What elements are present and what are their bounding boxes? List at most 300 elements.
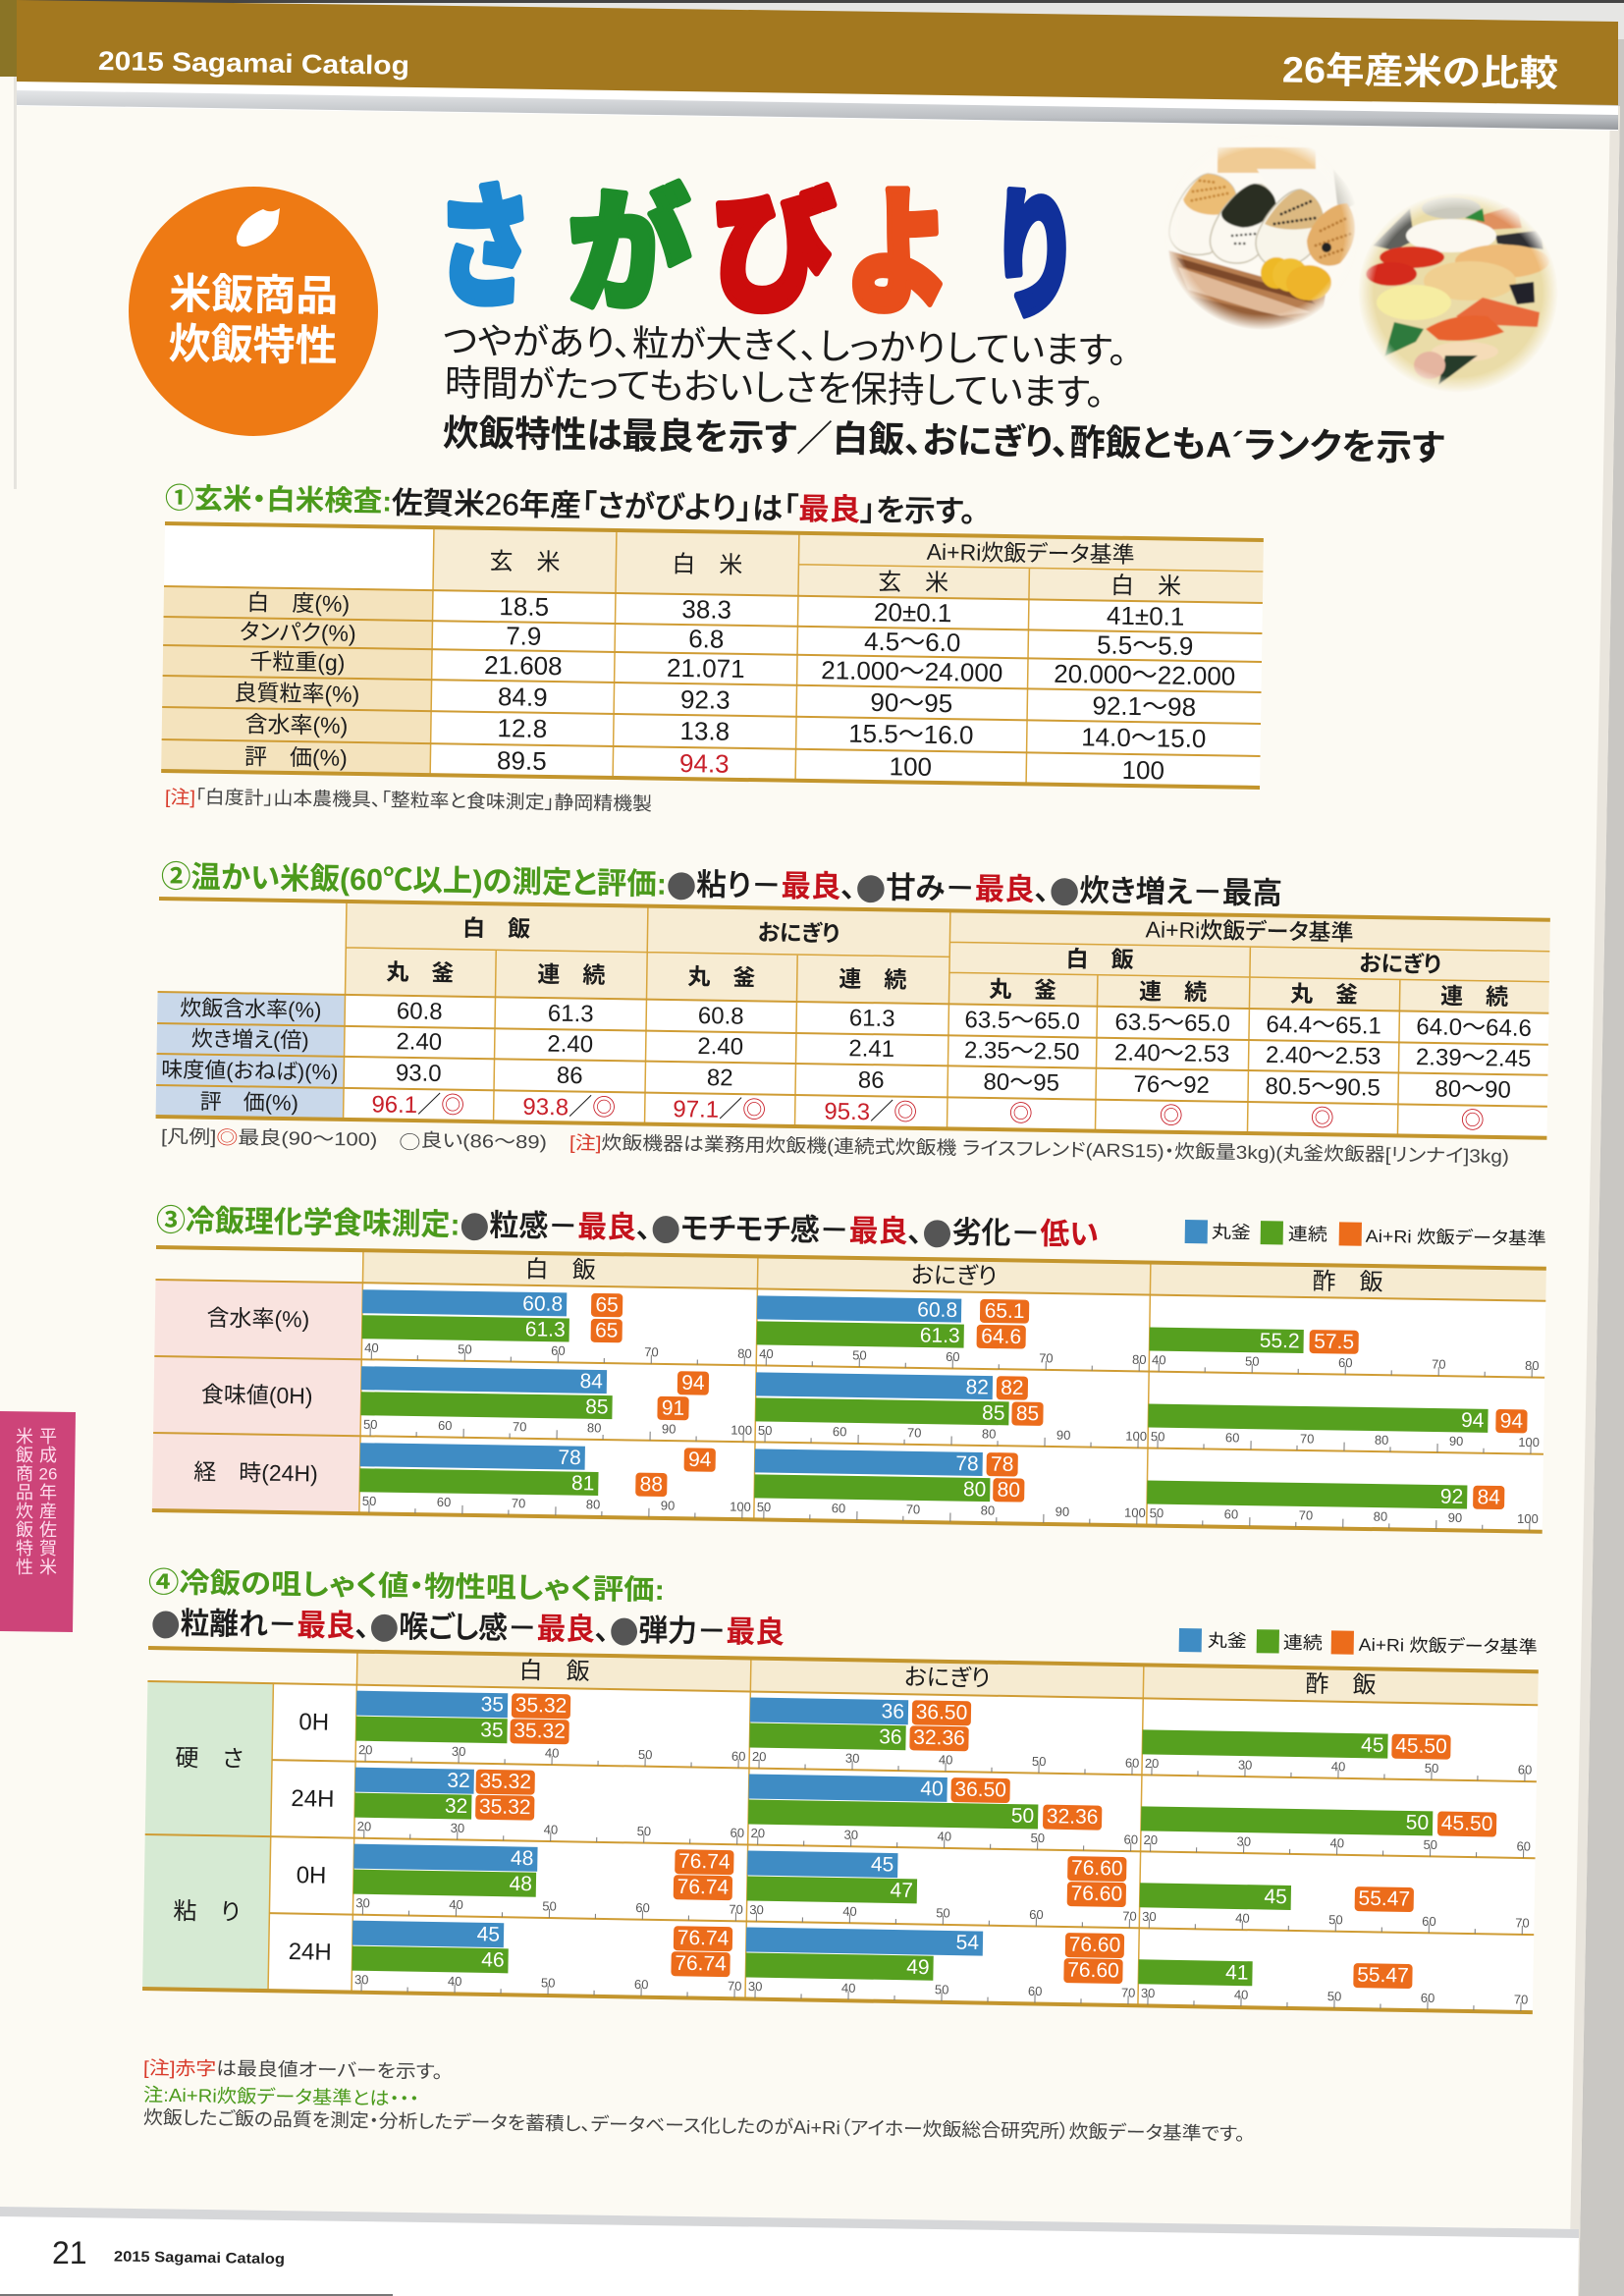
bars: 白飯 粘り 24H: 60	[634, 1977, 649, 1992]
table 1: 玄米・白米検査: 含水率(%)	[244, 711, 348, 738]
bars: 酢飯 硬さ 24H: 45.50	[1441, 1812, 1493, 1835]
bars: 白飯 粘り 0H: 48	[511, 1847, 534, 1870]
chart 3: 冷飯理化学食味測定: 酢 飯	[1312, 1269, 1383, 1296]
table 2: 温かい米飯の測定と評価: 炊き増え(倍)	[191, 1026, 309, 1053]
bars: 白飯 粘り 0H	[352, 1844, 744, 1921]
bars: 白飯 硬さ 24H: 30	[451, 1821, 464, 1835]
table 2: 温かい米飯の測定と評価: 丸 釜	[687, 963, 756, 990]
page number and catalog name	[52, 2235, 285, 2270]
bars: 酢飯 含水率	[1149, 1328, 1540, 1378]
bars: 白飯 含水率: 40	[364, 1340, 379, 1355]
table 1: 玄米・白米検査: 94.3	[679, 748, 730, 779]
table 2: 温かい米飯の測定と評価: 93.0	[396, 1060, 442, 1087]
bars: 酢飯 経時: 84	[1477, 1486, 1500, 1509]
bars: 酢飯 硬さ 0H: 30	[1238, 1758, 1252, 1773]
bars: おにぎり 硬さ 24H: 60	[1123, 1832, 1138, 1847]
table 2: 温かい米飯の測定と評価: 80～95	[983, 1068, 1059, 1097]
bars: 白飯 経時: 78	[558, 1447, 581, 1469]
bars: 白飯 経時: 88	[639, 1473, 663, 1496]
bars: 酢飯 硬さ 24H: 30	[1236, 1833, 1251, 1849]
bars: 白飯 食味値: 60	[438, 1418, 453, 1433]
bars: おにぎり 食味値: 85	[1016, 1402, 1039, 1425]
chart 3: 冷飯理化学食味測定	[152, 1247, 1546, 1532]
bars: 酢飯 粘り 0H: 30	[1142, 1909, 1157, 1924]
heading 4: ●粒離れ－最良、●喉ごし感－最良、●弾力－最良	[151, 1601, 785, 1654]
table 2: 温かい米飯の測定と評価: 白 飯	[1065, 946, 1134, 972]
table 1: 玄米・白米検査: 90～95	[870, 687, 952, 718]
bars: 白飯 経時: 81	[571, 1472, 595, 1495]
chart 4: 冷飯の咀しゃく値: 硬 さ	[175, 1745, 244, 1773]
footer notes: 炊飯したご飯の品質を測定・分析したデータを蓄積し、データベース化したのがAi+Ri（アイホー炊飯総合研究所）炊飯データ基準です。	[143, 2107, 1245, 2146]
table 2: 温かい米飯の測定と評価: 63.5～65.0	[1114, 1009, 1230, 1037]
tab text: 佐	[39, 1520, 57, 1540]
tagline text: 炊飯特性は最良を示す／白飯、おにぎり、酢飯ともA´ランクを示す	[443, 413, 1444, 468]
table 2: 温かい米飯の測定と評価: 93.8／◎	[522, 1093, 616, 1121]
bars: 白飯 硬さ 0H: 35	[480, 1719, 504, 1742]
table 2: 温かい米飯の測定と評価: 86	[557, 1063, 583, 1089]
bars: 白飯 硬さ 24H: 50	[637, 1824, 651, 1838]
bars: おにぎり 粘り 0H: 47	[890, 1879, 913, 1902]
chart 4: 冷飯の咀しゃく値: 0H	[298, 1709, 329, 1736]
table 2: 温かい米飯の測定と評価: ◎	[1009, 1101, 1033, 1127]
table 1: 玄米・白米検査: 89.5	[497, 745, 547, 776]
bars: 酢飯 硬さ 0H	[1142, 1729, 1533, 1781]
bars: おにぎり 経時: 70	[906, 1502, 920, 1516]
table 2: 温かい米飯の測定と評価: 2.40～2.53	[1114, 1039, 1230, 1067]
bars: 白飯 食味値: 90	[662, 1421, 677, 1437]
bars: 白飯 硬さ 24H	[354, 1768, 745, 1844]
table 2: 温かい米飯の測定と評価: Ai+Ri炊飯データ基準	[1145, 916, 1354, 946]
bars: 白飯 硬さ 0H: 35.32	[515, 1694, 568, 1718]
title: さがびより	[442, 175, 1068, 336]
bars: 酢飯 粘り 24H: 70	[1514, 1992, 1528, 2007]
bars: おにぎり 粘り 24H: 50	[935, 1982, 949, 1996]
table 2: 温かい米飯の測定と評価: 連 続	[839, 966, 907, 993]
tab text: 品	[16, 1483, 33, 1503]
title: さがびより: さ	[442, 175, 526, 324]
heading 2: ②温かい米飯(60℃以上)の測定と評価:●粘り－最良、●甘み－最良、●炊き増え－最高	[161, 854, 1282, 915]
bars: おにぎり 食味値: 85	[982, 1401, 1005, 1425]
table 2 legend: [凡例] ◎最良(90～100) ○良い(86～89)	[161, 1124, 547, 1156]
chart 4: 冷飯の咀しゃく値	[142, 1648, 1539, 2012]
bars: 酢飯 粘り 0H: 45	[1264, 1886, 1287, 1908]
bars: おにぎり 経時: 80	[997, 1479, 1020, 1502]
legend: chart 4	[1179, 1628, 1538, 1658]
title: さがびより: り	[1000, 179, 1068, 336]
bars: おにぎり 経時: 78	[991, 1453, 1014, 1476]
bars: 酢飯 粘り 0H	[1139, 1883, 1530, 1935]
bars: おにぎり 食味値: 80	[982, 1426, 997, 1442]
bars: 白飯 硬さ 0H: 30	[452, 1744, 466, 1759]
bars: 白飯 硬さ 24H: 32	[447, 1770, 470, 1792]
table 1: 玄米・白米検査: 18.5	[499, 591, 549, 622]
bars: 白飯 含水率: 65	[595, 1319, 619, 1342]
bars: 白飯 食味値	[360, 1366, 753, 1442]
title: さがびより: び	[712, 179, 834, 328]
bars: 酢飯 粘り 24H: 60	[1421, 1991, 1435, 2005]
table 1: 玄米・白米検査: 13.8	[679, 716, 730, 746]
bars: おにぎり 硬さ 24H: 40	[920, 1777, 944, 1800]
tab text: 年	[39, 1483, 57, 1503]
bars: 酢飯 硬さ 0H: 45	[1361, 1734, 1384, 1757]
bars: 酢飯 経時: 60	[1224, 1506, 1238, 1521]
bars: おにぎり 含水率: 60.8	[917, 1298, 957, 1322]
table 2: 温かい米飯の測定と評価: 白 飯	[462, 915, 530, 942]
tagline text: つやがあり、粒が大きく、しっかりしています。	[443, 321, 1127, 371]
table 1: 玄米・白米検査: 21.071	[667, 653, 745, 683]
bars: おにぎり 経時: 50	[757, 1500, 771, 1514]
footer notes: [注]赤字 は最良値オーバーを示す。	[143, 2057, 443, 2083]
table 2: 温かい米飯の測定と評価: 2.39～2.45	[1416, 1044, 1532, 1072]
bars: 白飯 粘り 24H: 46	[481, 1948, 505, 1972]
bars: おにぎり 硬さ 0H: 36	[881, 1700, 904, 1723]
bars: おにぎり 粘り 24H: 30	[748, 1979, 763, 1994]
bars: おにぎり 経時	[754, 1449, 1147, 1525]
bars: おにぎり 粘り 24H: 40	[841, 1981, 856, 1995]
bars: おにぎり 硬さ 0H: 50	[1032, 1754, 1047, 1769]
bars: おにぎり 硬さ 24H: 30	[843, 1828, 858, 1842]
bars: 酢飯 経時: 70	[1299, 1507, 1313, 1523]
bars: 酢飯 経時: 100	[1517, 1511, 1539, 1526]
table 2: 温かい米飯の測定と評価: 61.3	[849, 1005, 895, 1032]
chart 3: 冷飯理化学食味測定: 食味値(0H)	[201, 1382, 313, 1408]
table 2: 温かい米飯の測定と評価: 2.35～2.50	[964, 1037, 1080, 1066]
table 2: 温かい米飯の測定と評価: ◎	[1460, 1108, 1485, 1134]
table 2: 温かい米飯の測定と評価: 丸 釜	[989, 976, 1056, 1003]
table 2: 温かい米飯の測定と評価: 96.1／◎	[371, 1091, 464, 1119]
tagline text	[443, 321, 1444, 468]
table 1: 玄米・白米検査: 白 米	[1110, 573, 1181, 600]
table 1: 玄米・白米検査: 7.9	[506, 621, 542, 651]
bars: 酢飯 硬さ 24H: 50	[1423, 1837, 1437, 1852]
tab text: 賀	[39, 1539, 57, 1558]
chart 4: 冷飯の咀しゃく値: 24H	[288, 1939, 332, 1966]
bars: おにぎり 粘り 24H	[745, 1927, 1136, 2004]
bars: 酢飯 硬さ 24H: 40	[1329, 1835, 1344, 1850]
badge text: 米飯商品	[169, 271, 339, 320]
table 1: 玄米・白米検査: 84.9	[498, 682, 548, 712]
bars: おにぎり 粘り 24H: 76.60	[1068, 1934, 1120, 1956]
bars: 白飯 硬さ 24H: 32	[445, 1795, 467, 1818]
chart 4: 冷飯の咀しゃく値: 0H	[296, 1862, 327, 1889]
table 2: 温かい米飯の測定と評価: 80～90	[1435, 1075, 1511, 1104]
bars: 酢飯 含水率: 50	[1245, 1354, 1260, 1369]
table 1: 玄米・白米検査: 玄 米	[878, 570, 948, 597]
bars: おにぎり 経時: 78	[955, 1452, 979, 1475]
bars: 白飯 硬さ 24H: 35.32	[479, 1795, 531, 1819]
bars: おにぎり 硬さ 24H	[748, 1774, 1139, 1851]
table 1: 玄米・白米検査: 白 度(%)	[246, 589, 350, 617]
bars: おにぎり 硬さ 24H: 50	[1011, 1805, 1034, 1828]
chart 3: 冷飯理化学食味測定: 経 時(24H)	[193, 1459, 318, 1487]
bars: 酢飯 食味値: 60	[1225, 1430, 1240, 1445]
bars: 白飯 経時: 94	[688, 1449, 712, 1471]
bars: 白飯 食味値: 85	[585, 1395, 609, 1419]
bars: 酢飯 食味値: 94	[1461, 1409, 1485, 1432]
bars: 酢飯 含水率: 70	[1432, 1356, 1446, 1372]
bars: おにぎり 経時: 90	[1056, 1504, 1069, 1519]
tab text: 産	[39, 1502, 57, 1521]
bars: 酢飯 硬さ 0H: 45.50	[1395, 1734, 1447, 1758]
heading 1: ①玄米・白米検査:佐賀米26年産「さがびより」は「最良」を示す。	[165, 482, 976, 528]
bars: 白飯 含水率: 80	[737, 1346, 752, 1361]
bars: 白飯 経時: 80	[586, 1497, 600, 1511]
chart 3: 冷飯理化学食味測定: おにぎり	[911, 1262, 998, 1290]
bars: おにぎり 粘り 0H: 70	[1122, 1909, 1137, 1924]
bars: 白飯 食味値: 94	[681, 1372, 705, 1394]
bars: 酢飯 食味値	[1148, 1404, 1540, 1454]
bars: おにぎり 硬さ 0H: 20	[752, 1749, 767, 1764]
tab text: 26	[39, 1465, 57, 1483]
bars: 白飯 含水率: 60.8	[522, 1292, 563, 1316]
footer notes	[143, 2057, 1245, 2146]
photo: sushi	[1359, 194, 1556, 391]
table 1: 玄米・白米検査: 100	[1121, 755, 1164, 785]
bars: おにぎり 食味値: 82	[965, 1376, 989, 1399]
bars: 白飯 食味値: 100	[731, 1423, 752, 1438]
bars: 酢飯 粘り 0H: 55.47	[1358, 1887, 1410, 1911]
header section title: 26年産米の比較	[1282, 50, 1558, 94]
table 1: 玄米・白米検査: 12.8	[497, 713, 547, 743]
bars: おにぎり 粘り 24H: 70	[1121, 1986, 1136, 2000]
bars: 白飯 食味値: 84	[579, 1370, 603, 1394]
bars: おにぎり 粘り 0H	[746, 1850, 1138, 1928]
heading 4	[148, 1566, 785, 1654]
table 2: 温かい米飯の測定と評価	[156, 899, 1550, 1138]
bars: おにぎり 含水率: 64.6	[981, 1325, 1021, 1348]
bars: おにぎり 含水率: 61.3	[920, 1324, 960, 1347]
table 2: 温かい米飯の測定と評価: 2.40	[547, 1031, 593, 1058]
bars: 酢飯 粘り 0H: 70	[1515, 1915, 1530, 1931]
bars: 白飯 粘り 0H: 50	[542, 1898, 557, 1914]
bars: 酢飯 粘り 24H: 50	[1327, 1989, 1341, 2003]
legend: chart 3: 連続	[1288, 1225, 1327, 1244]
bars: 酢飯 硬さ 0H: 50	[1425, 1761, 1438, 1776]
page number and catalog name: 21	[52, 2235, 87, 2270]
legend: chart 3: 丸釜	[1212, 1222, 1251, 1242]
legend: chart 3	[1185, 1220, 1546, 1249]
bars: 酢飯 硬さ 24H: 60	[1516, 1838, 1531, 1854]
bars: おにぎり 硬さ 0H: 30	[845, 1751, 860, 1766]
bars: おにぎり 含水率: 60	[946, 1349, 960, 1364]
bars: おにぎり 食味値: 70	[907, 1425, 922, 1440]
tab text: 米	[39, 1558, 57, 1577]
table 1: 玄米・白米検査: 良質粒率(%)	[234, 680, 359, 707]
bars: 白飯 経時: 60	[437, 1495, 451, 1509]
table 2 note: [注]炊飯機器は業務用炊飯機(連続式炊飯機 ライスフレンド(ARS15)・炊飯量3kg)(丸釜炊飯器[リンナイ]3kg)	[569, 1132, 1509, 1168]
bars: おにぎり 粘り 24H: 54	[955, 1932, 980, 1954]
bars: おにぎり 硬さ 24H: 40	[937, 1829, 951, 1844]
heading 4: ④冷飯の咀しゃく値・物性咀しゃく評価:	[148, 1566, 665, 1607]
bars: おにぎり 硬さ 24H: 20	[751, 1826, 765, 1840]
bars: 酢飯 硬さ 0H: 40	[1331, 1759, 1345, 1774]
bars: 酢飯 経時: 50	[1150, 1505, 1164, 1520]
bars: 白飯 粘り 24H: 45	[477, 1923, 500, 1946]
table 2: 温かい米飯の測定と評価: 97.1／◎	[673, 1096, 766, 1123]
bars: 酢飯 粘り 24H: 55.47	[1357, 1964, 1409, 1988]
table 1: 玄米・白米検査: タンパク(%)	[240, 619, 356, 646]
table 1: 玄米・白米検査: 6.8	[688, 624, 725, 654]
table 2: 温かい米飯の測定と評価: 炊飯含水率(%)	[180, 996, 322, 1022]
bars: 白飯 粘り 24H	[352, 1921, 742, 1997]
bars: 白飯 含水率: 70	[644, 1344, 659, 1359]
title: さがびより: よ	[847, 176, 944, 331]
table 1 note: [注]「白度計」山本農機具、「整粒率と食味測定」静岡精機製	[165, 787, 652, 815]
bars: 白飯 経時: 50	[362, 1494, 376, 1508]
bars: おにぎり 粘り 0H: 50	[936, 1905, 950, 1921]
table 1: 玄米・白米検査: 白 米	[672, 551, 743, 578]
table 2: 温かい米飯の測定と評価: ◎	[1160, 1103, 1183, 1130]
table 2: 温かい米飯の測定と評価: おにぎり	[1359, 951, 1441, 977]
bars: 白飯 粘り 24H: 76.74	[677, 1927, 730, 1950]
bars: 白飯 粘り 24H: 30	[354, 1972, 369, 1987]
tab text: 飯	[16, 1520, 33, 1540]
bars: おにぎり 含水率	[756, 1295, 1148, 1372]
bars: おにぎり 粘り 24H: 60	[1028, 1984, 1043, 1998]
table 1: 玄米・白米検査: 評 価(%)	[244, 743, 348, 771]
bars: 白飯 粘り 0H: 76.74	[678, 1850, 731, 1874]
bars: 酢飯 食味値: 94	[1500, 1410, 1524, 1433]
bars: 白飯 含水率	[361, 1289, 753, 1365]
table 2: 温かい米飯の測定と評価: 86	[858, 1066, 885, 1094]
bars: 酢飯 粘り 24H: 41	[1225, 1961, 1249, 1985]
bars: 酢飯 食味値: 100	[1518, 1435, 1540, 1449]
pink side tab	[0, 1411, 76, 1632]
bars: 白飯 食味値: 50	[363, 1417, 378, 1432]
chart 3: 冷飯理化学食味測定: 含水率(%)	[206, 1305, 309, 1332]
bars: 白飯 含水率: 60	[551, 1343, 566, 1358]
bars: 白飯 粘り 0H: 70	[729, 1902, 743, 1917]
tab text: 炊	[16, 1502, 33, 1521]
table 2: 温かい米飯の測定と評価: おにぎり	[758, 919, 840, 947]
tab text: 平	[39, 1427, 57, 1447]
tab text: 性	[16, 1558, 33, 1577]
bars: おにぎり 粘り 0H: 76.60	[1071, 1857, 1123, 1881]
bars: 白飯 食味値: 91	[662, 1396, 684, 1420]
bars: 酢飯 粘り 24H: 30	[1141, 1986, 1155, 2000]
bars: 白飯 粘り 24H: 50	[541, 1975, 556, 1991]
bars: 酢飯 硬さ 24H	[1141, 1806, 1532, 1858]
bars: おにぎり 含水率: 50	[852, 1347, 867, 1363]
table 1: 玄米・白米検査: Ai+Ri炊飯データ基準	[927, 539, 1135, 568]
tagline text: 時間がたってもおいしさを保持しています。	[445, 363, 1105, 413]
bars: 酢飯 粘り 24H	[1138, 1959, 1529, 2011]
bars: 酢飯 含水率: 55.2	[1260, 1330, 1300, 1352]
table 1: 玄米・白米検査: 14.0～15.0	[1081, 722, 1207, 753]
bars: おにぎり 含水率: 40	[759, 1346, 774, 1361]
bars: おにぎり 硬さ 0H: 36	[879, 1725, 902, 1749]
table 1: 玄米・白米検査: 15.5～16.0	[848, 719, 974, 750]
table 2: 温かい米飯の測定と評価: ◎	[1310, 1106, 1334, 1132]
bars: 白飯 硬さ 24H: 60	[731, 1826, 744, 1840]
table 1: 玄米・白米検査: 92.1～98	[1092, 690, 1196, 722]
table 1: 玄米・白米検査: 玄 米	[489, 549, 561, 576]
table 1: 玄米・白米検査: 20±0.1	[874, 597, 952, 628]
bars: おにぎり 食味値: 60	[833, 1424, 847, 1439]
bars: 酢飯 硬さ 0H: 60	[1518, 1762, 1532, 1777]
bars: 酢飯 含水率: 40	[1152, 1352, 1166, 1367]
bars: おにぎり 粘り 0H: 45	[871, 1853, 894, 1877]
table 1: 玄米・白米検査	[161, 523, 1264, 788]
legend: chart 3: Ai+Ri 炊飯データ基準	[1366, 1227, 1546, 1249]
bars: おにぎり 含水率: 70	[1039, 1350, 1054, 1366]
chart 4: 冷飯の咀しゃく値: 酢 飯	[1305, 1671, 1377, 1699]
bars: 白飯 含水率: 50	[458, 1341, 472, 1356]
bars: 酢飯 食味値: 70	[1300, 1431, 1314, 1447]
bars: 白飯 硬さ 24H: 40	[544, 1822, 558, 1837]
bars: 酢飯 経時: 92	[1440, 1486, 1463, 1508]
header band	[0, 0, 1618, 105]
bars: 白飯 硬さ 0H: 40	[545, 1745, 560, 1761]
bars: おにぎり 粘り 0H: 40	[842, 1904, 857, 1919]
table 1: 玄米・白米検査: 92.3	[680, 684, 731, 715]
table 2: 温かい米飯の測定と評価: 60.8	[698, 1003, 744, 1030]
bars: 白飯 粘り 24H: 70	[728, 1979, 742, 1994]
bars: 酢飯 食味値: 50	[1151, 1429, 1165, 1444]
tab text: 商	[16, 1464, 33, 1484]
bars: おにぎり 食味値: 100	[1125, 1429, 1147, 1444]
legend: chart 4: Ai+Ri 炊飯データ基準	[1359, 1635, 1538, 1658]
table 2: 温かい米飯の測定と評価: 80.5～90.5	[1265, 1073, 1380, 1102]
title: さがびより: が	[568, 178, 689, 327]
bars: 酢飯 食味値: 90	[1449, 1434, 1463, 1449]
table 2: 温かい米飯の測定と評価: 評 価(%)	[200, 1089, 298, 1116]
legend: chart 4: 連続	[1283, 1633, 1323, 1653]
bars: 白飯 粘り 0H: 30	[355, 1895, 370, 1910]
bars: おにぎり 粘り 24H: 49	[906, 1956, 930, 1979]
table 2: 温かい米飯の測定と評価: 61.3	[548, 1001, 594, 1027]
table 2: 温かい米飯の測定と評価: 連 続	[1139, 978, 1207, 1005]
table 2: 温かい米飯の測定と評価: 丸 釜	[1290, 981, 1358, 1008]
bars: 白飯 粘り 0H: 76.74	[677, 1876, 730, 1899]
bars: 酢飯 硬さ 24H: 20	[1143, 1832, 1158, 1847]
bars: 白飯 硬さ 0H: 35.32	[514, 1720, 566, 1743]
bars: 酢飯 経時: 80	[1374, 1509, 1387, 1524]
table 1: 玄米・白米検査: 41±0.1	[1107, 601, 1185, 631]
bars: 白飯 食味値: 70	[513, 1419, 527, 1434]
tab text: 飯	[16, 1446, 33, 1465]
table 1: 玄米・白米検査: 千粒重(g)	[249, 648, 346, 676]
bars: 白飯 含水率: 65	[595, 1293, 619, 1317]
tab text	[16, 1427, 57, 1577]
bars: おにぎり 粘り 0H: 60	[1029, 1907, 1044, 1922]
table 2: 温かい米飯の測定と評価: 64.0～64.6	[1416, 1013, 1532, 1042]
bars: 酢飯 粘り 24H: 40	[1234, 1987, 1248, 2002]
photo: onigiri	[1168, 146, 1355, 330]
table 2: 温かい米飯の測定と評価: 63.5～65.0	[964, 1007, 1080, 1035]
bars: おにぎり 硬さ 24H: 32.36	[1047, 1805, 1099, 1829]
tab text: 成	[39, 1446, 57, 1465]
bars: 白飯 粘り 0H: 60	[635, 1900, 650, 1915]
table 2: 温かい米飯の測定と評価: 丸 釜	[386, 959, 455, 986]
table 2: 温かい米飯の測定と評価: 2.40	[697, 1033, 743, 1061]
badge text	[168, 271, 339, 370]
table 1: 玄米・白米検査: 38.3	[681, 594, 731, 625]
table 2: 温かい米飯の測定と評価: 2.40～2.53	[1266, 1042, 1381, 1070]
bars: おにぎり 経時: 80	[981, 1503, 995, 1518]
bars: おにぎり 食味値	[755, 1372, 1148, 1449]
bars: おにぎり 食味値: 90	[1056, 1428, 1071, 1443]
table 1: 玄米・白米検査: 4.5～6.0	[864, 627, 961, 657]
bars: 白飯 含水率: 61.3	[525, 1318, 566, 1341]
table 1: 玄米・白米検査: 21.000～24.000	[821, 655, 1003, 687]
table 2: 温かい米飯の測定と評価: 60.8	[397, 998, 443, 1025]
table 1: 玄米・白米検査: 5.5～5.9	[1097, 629, 1194, 661]
bars: おにぎり 経時: 100	[1124, 1505, 1146, 1520]
bars: 酢飯 硬さ 24H: 50	[1406, 1811, 1429, 1834]
badge text: 炊飯特性	[168, 321, 338, 370]
table 2: 温かい米飯の測定と評価: 連 続	[537, 961, 606, 988]
